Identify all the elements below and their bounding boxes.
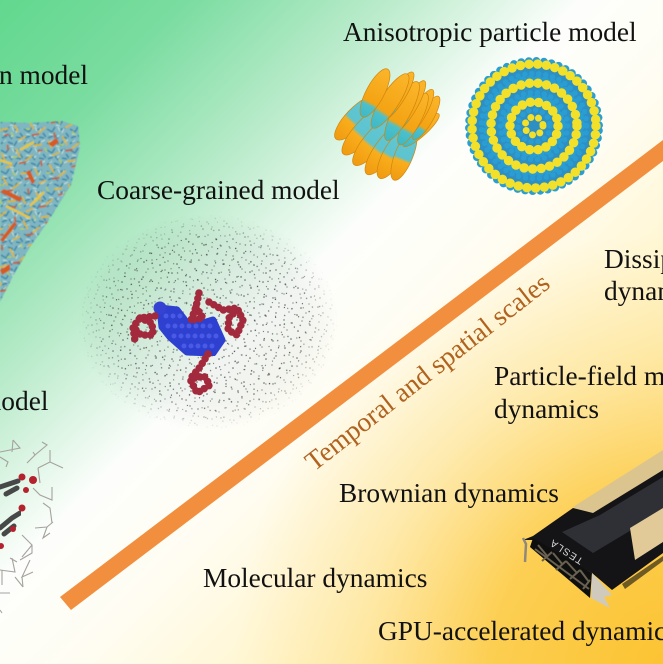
molecular detail: all-atom model xyxy=(0,440,63,613)
tan shroud side xyxy=(630,508,663,560)
lower ellipsoid row xyxy=(329,90,422,183)
label: coarse-grained model heading: Coarse-grained model xyxy=(97,175,340,205)
GPU card xyxy=(523,450,663,608)
red oxygen atoms xyxy=(0,474,37,549)
coarse-grained model rendering xyxy=(80,216,336,428)
red polymer chains xyxy=(133,293,243,393)
left bracket tab xyxy=(523,538,526,562)
dark top plate xyxy=(562,477,663,553)
tan shroud top xyxy=(573,450,663,515)
thin gray bonds xyxy=(0,440,63,613)
blue inner rings xyxy=(482,74,586,178)
anisotropic particle model: concentric ring disc xyxy=(468,60,600,192)
solvent particle cloud xyxy=(80,216,336,428)
orange scale bar xyxy=(60,140,663,610)
label: Brownian dynamics: Brownian dynamics xyxy=(339,478,559,508)
yellow sphere rings xyxy=(472,64,596,188)
upper ellipsoid row xyxy=(354,65,445,151)
vent grid face xyxy=(530,538,592,598)
silver bracket xyxy=(591,573,612,608)
anisotropic particle model: ellipsoid bundle xyxy=(329,65,445,183)
label: particle-field molecular dynamics: dynamics xyxy=(494,394,599,424)
label: atomistic model heading: n model xyxy=(0,60,88,90)
gold edge connector xyxy=(622,556,663,589)
blue polymer core xyxy=(154,302,222,353)
atomistic model rendering xyxy=(0,118,84,308)
blue sphere rings xyxy=(469,61,599,191)
black body xyxy=(523,470,663,590)
axis label: temporal and spatial scales: Temporal and spatial scales xyxy=(299,267,555,477)
dark aromatic rings xyxy=(0,481,20,534)
TESLA label: TESLA xyxy=(548,536,585,566)
label: Molecular dynamics: Molecular dynamics xyxy=(203,563,427,593)
label: anisotropic particle model heading: Anisotropic particle model xyxy=(343,17,637,47)
